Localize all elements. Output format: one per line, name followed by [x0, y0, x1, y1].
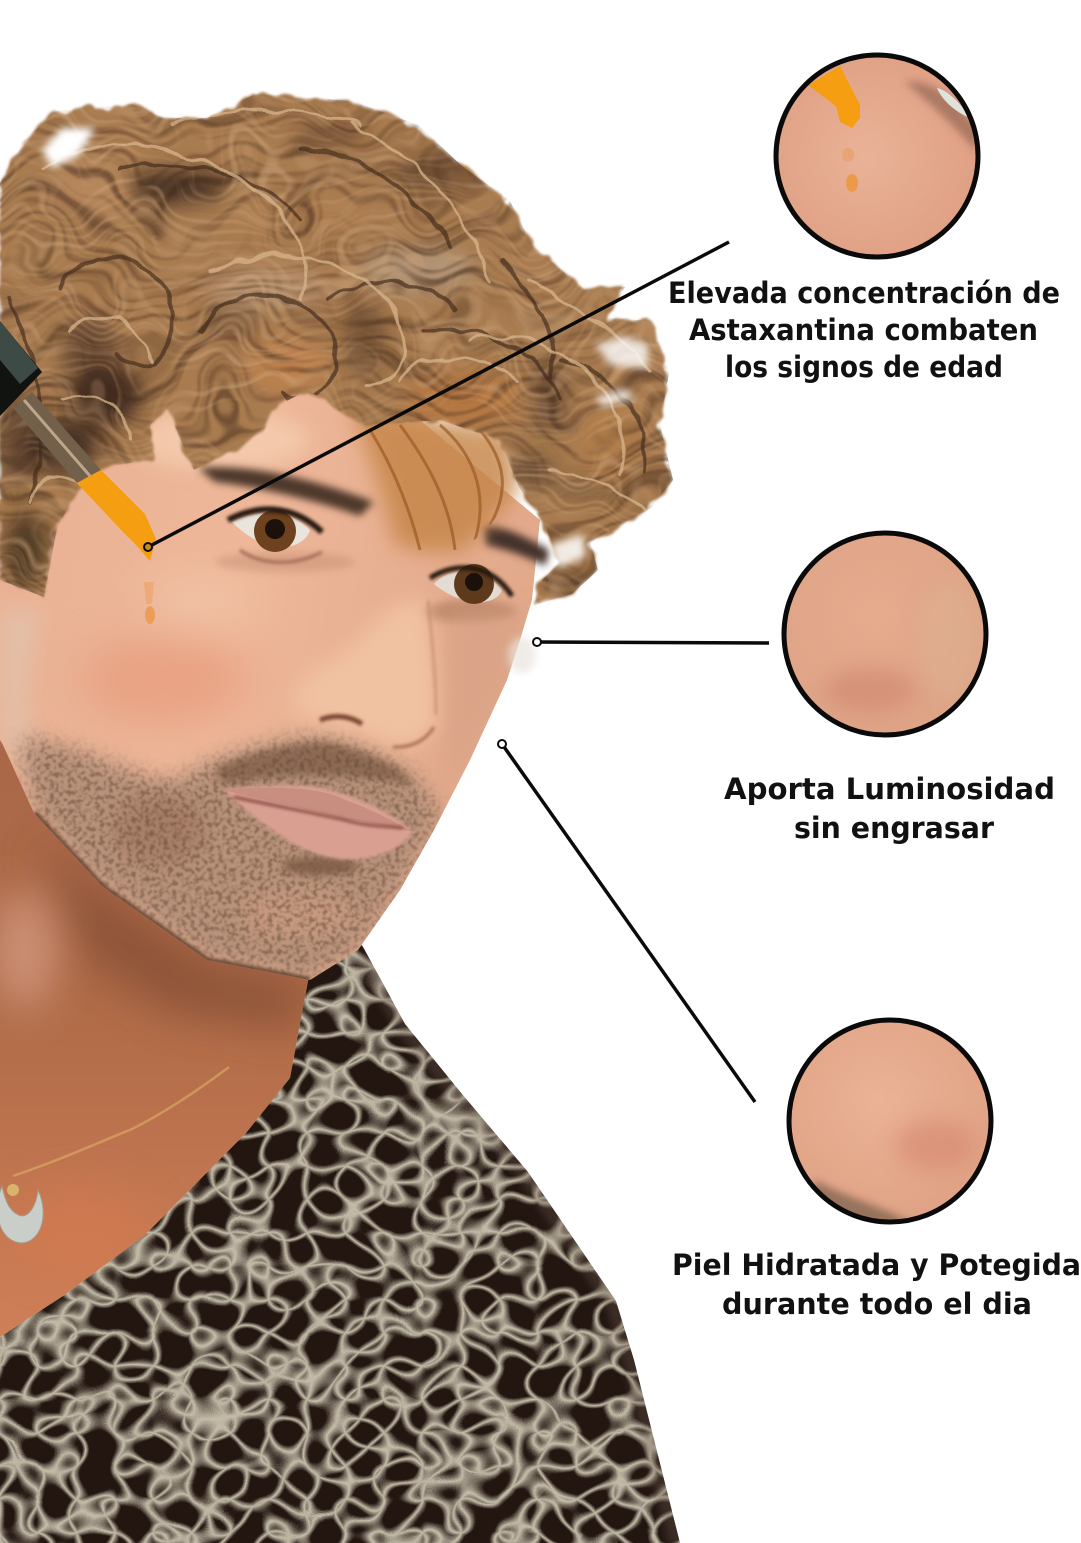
caption 3: [672, 1248, 1081, 1321]
shirt with crackle pattern: [0, 940, 700, 1543]
stubble jaw: [20, 737, 440, 980]
photo: man applying serum: [0, 90, 680, 1543]
caption 3: durante todo el dia: [722, 1287, 1032, 1321]
right eyebrow: [484, 526, 550, 566]
caption 1: los signos de edad: [725, 350, 1003, 384]
orange fringe over forehead: [350, 405, 520, 552]
dropper serum: [77, 470, 156, 561]
close-up circle 3: hydrated skin: [788, 1019, 992, 1230]
nose: [293, 600, 436, 747]
dropper and serum: [0, 321, 156, 624]
caption 3: Piel Hidratada y Potegida: [672, 1248, 1081, 1282]
leader line 2: [533, 638, 769, 646]
gaps of white between curls: [42, 128, 648, 568]
face: [0, 370, 540, 990]
curl strands: [10, 110, 650, 510]
caption 1: [668, 276, 1060, 384]
left eyebrow: [198, 467, 374, 516]
necklace: [0, 1067, 229, 1243]
under-lip shadow: [282, 857, 358, 875]
forehead light: [150, 414, 308, 470]
neck and chest: [0, 700, 320, 1337]
caption 2: sin engrasar: [794, 811, 995, 845]
close-up circle 2: luminous skin: [783, 532, 987, 736]
right eye: [430, 564, 512, 604]
hair: [0, 90, 674, 606]
temple hair wisps: [508, 637, 536, 673]
caption 1: Elevada concentración de: [668, 276, 1060, 310]
close-up circle 1: serum drop on skin: [775, 54, 980, 258]
strand texture: [0, 94, 673, 604]
cheek colour: [80, 635, 250, 725]
hair dark masses: [0, 123, 630, 597]
sideburn fade: [0, 609, 38, 754]
caption 2: Aporta Luminosidad: [724, 772, 1055, 806]
neck shadow and highlight: [0, 840, 310, 1270]
chin light: [244, 892, 354, 938]
dropper glass: [13, 392, 101, 483]
leader line 1: [144, 242, 729, 551]
stubble grain: [12, 728, 441, 976]
caption 2: [724, 772, 1055, 845]
dropper cap: [0, 321, 42, 416]
mouth: [224, 785, 414, 860]
serum drips: [144, 582, 155, 624]
caption 1: Astaxantina combaten: [689, 313, 1038, 347]
left eye: [228, 509, 322, 562]
hair warm and light masses: [48, 162, 638, 488]
jaw dark edge: [34, 813, 310, 980]
mustache shadow: [214, 742, 414, 785]
far cheek shade: [454, 611, 526, 772]
eye socket shadows: [215, 552, 355, 572]
leader line 3: [498, 740, 755, 1102]
